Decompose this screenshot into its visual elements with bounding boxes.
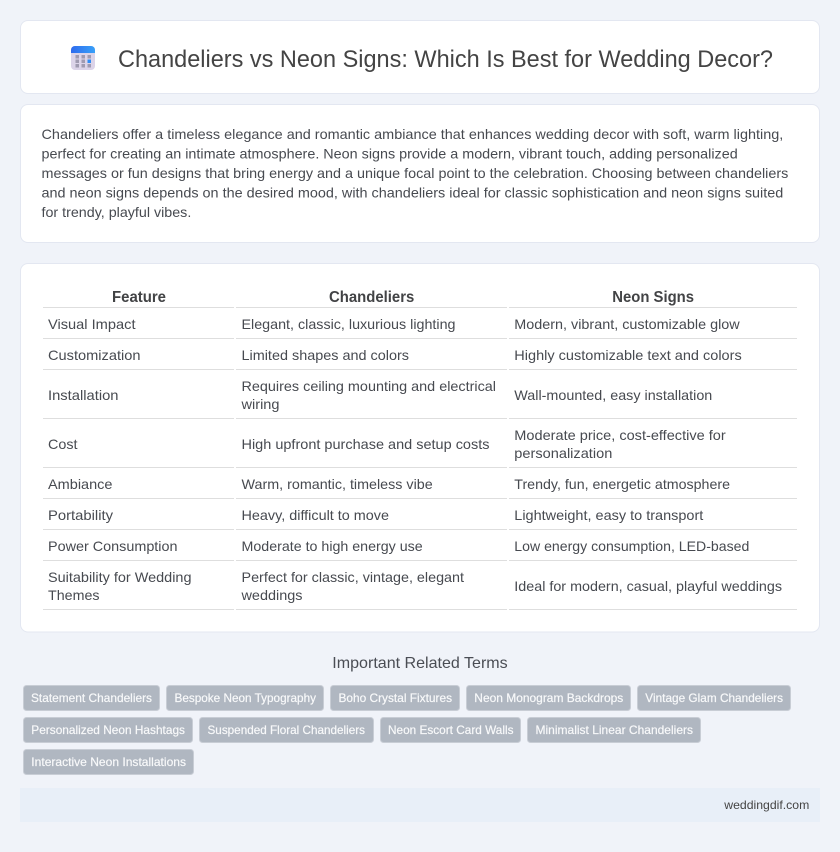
row: visual impact: Modern, vibrant, customizable glow (514, 316, 741, 332)
intro paragraph: Chandeliers offer a timeless elegance and romantic ambiance that enhances wedding decor with soft, warm lighting, (42, 126, 783, 142)
row: suitability for wedding themes: weddings (240, 587, 302, 603)
table header row: Chandeliers (329, 289, 414, 306)
row: power consumption: Power Consumption (48, 538, 178, 554)
intro paragraph (42, 126, 788, 220)
row: ambiance: Warm, romantic, timeless vibe (242, 476, 433, 492)
table header row: Feature (112, 289, 166, 306)
row: power consumption: Low energy consumption, LED-based (514, 538, 749, 554)
tag: vintage glam chandeliers: Vintage Glam Chandeliers (645, 691, 783, 705)
intro paragraph: messages or fun designs that bring energy and a unique focal point to the celebration. Choosing between chandeliers (42, 165, 788, 181)
heading: important related terms: Important Related Terms (332, 655, 508, 672)
row: visual impact: Visual Impact (48, 316, 136, 332)
row: portability: Heavy, difficult to move (242, 507, 389, 523)
footer: weddingdif.com (723, 798, 809, 812)
tag: boho crystal fixtures: Boho Crystal Fixtures (338, 691, 452, 705)
row: suitability for wedding themes: Themes (48, 587, 100, 603)
intro paragraph: for trendy, playful vibes. (42, 204, 191, 220)
tag: vintage glam chandeliers (638, 686, 790, 710)
row: suitability for wedding themes (43, 569, 797, 610)
tag: minimalist linear chandeliers: Minimalist Linear Chandeliers (536, 723, 693, 737)
row: visual impact: Elegant, classic, luxurious lighting (242, 316, 456, 332)
row: installation: wiring (240, 396, 280, 412)
tag: bespoke neon typography: Bespoke Neon Typography (174, 691, 316, 705)
row: suitability for wedding themes: Perfect for classic, vintage, elegant (242, 569, 464, 585)
footer (20, 788, 820, 822)
row: portability: Lightweight, easy to transport (514, 507, 703, 523)
tag: statement chandeliers (24, 686, 160, 710)
icon: calendar (71, 46, 95, 70)
row: power consumption (43, 538, 797, 561)
intro paragraph: perfect for creating an intimate atmosphere. Neon signs provide a modern, vibrant touch, adding personalized (42, 146, 738, 162)
panel: title card (20, 20, 820, 94)
row: installation: Installation (48, 387, 118, 403)
row: ambiance (43, 476, 797, 499)
row: cost: Cost (48, 436, 78, 452)
title: Chandeliers vs Neon Signs: Which Is Best for Wedding Decor? (118, 46, 773, 73)
table header row (43, 289, 797, 308)
row: customization: Customization (48, 347, 140, 363)
row: portability (43, 507, 797, 530)
tag: personalized neon hashtags (24, 718, 192, 742)
row: portability: Portability (48, 507, 113, 523)
row: suitability for wedding themes: Suitability for Wedding (48, 569, 192, 585)
related term tags (24, 686, 790, 774)
row: cost: personalization (514, 445, 612, 461)
row: cost: High upfront purchase and setup costs (242, 436, 490, 452)
row: suitability for wedding themes: Ideal for modern, casual, playful weddings (514, 578, 782, 594)
tag: statement chandeliers: Statement Chandeliers (31, 691, 152, 705)
panel: intro text (20, 104, 820, 242)
tag: personalized neon hashtags: Personalized Neon Hashtags (31, 723, 185, 737)
tag: neon monogram backdrops: Neon Monogram Backdrops (474, 691, 623, 705)
row: ambiance: Trendy, fun, energetic atmosphere (514, 476, 730, 492)
tag: suspended floral chandeliers: Suspended Floral Chandeliers (208, 723, 365, 737)
panel: comparison table (20, 264, 820, 632)
row: cost: Moderate price, cost-effective for (514, 427, 726, 443)
tag: interactive neon installations (24, 750, 194, 774)
tag: boho crystal fixtures (330, 686, 460, 710)
row: visual impact (43, 316, 797, 339)
row: cost (43, 427, 797, 468)
tag: neon escort card walls (380, 718, 520, 742)
row: customization: Highly customizable text and colors (514, 347, 742, 363)
row: power consumption: Moderate to high energy use (242, 538, 423, 554)
row: customization (43, 347, 797, 370)
tag: neon escort card walls: Neon Escort Card Walls (388, 723, 514, 737)
tag: interactive neon installations: Interactive Neon Installations (31, 755, 186, 769)
row: installation: Wall-mounted, easy installation (514, 387, 712, 403)
row: ambiance: Ambiance (48, 476, 113, 492)
row: installation (43, 378, 797, 419)
intro paragraph: and neon signs depends on the desired mood, with chandeliers ideal for classic sophistication and neon signs suited (42, 184, 783, 200)
row: installation: Requires ceiling mounting and electrical (242, 378, 496, 394)
tag: suspended floral chandeliers (200, 718, 374, 742)
row: customization: Limited shapes and colors (242, 347, 409, 363)
tag: minimalist linear chandeliers (528, 718, 700, 742)
tag: neon monogram backdrops (466, 686, 630, 710)
table header row: Neon Signs (612, 289, 694, 306)
tag: bespoke neon typography (166, 686, 324, 710)
